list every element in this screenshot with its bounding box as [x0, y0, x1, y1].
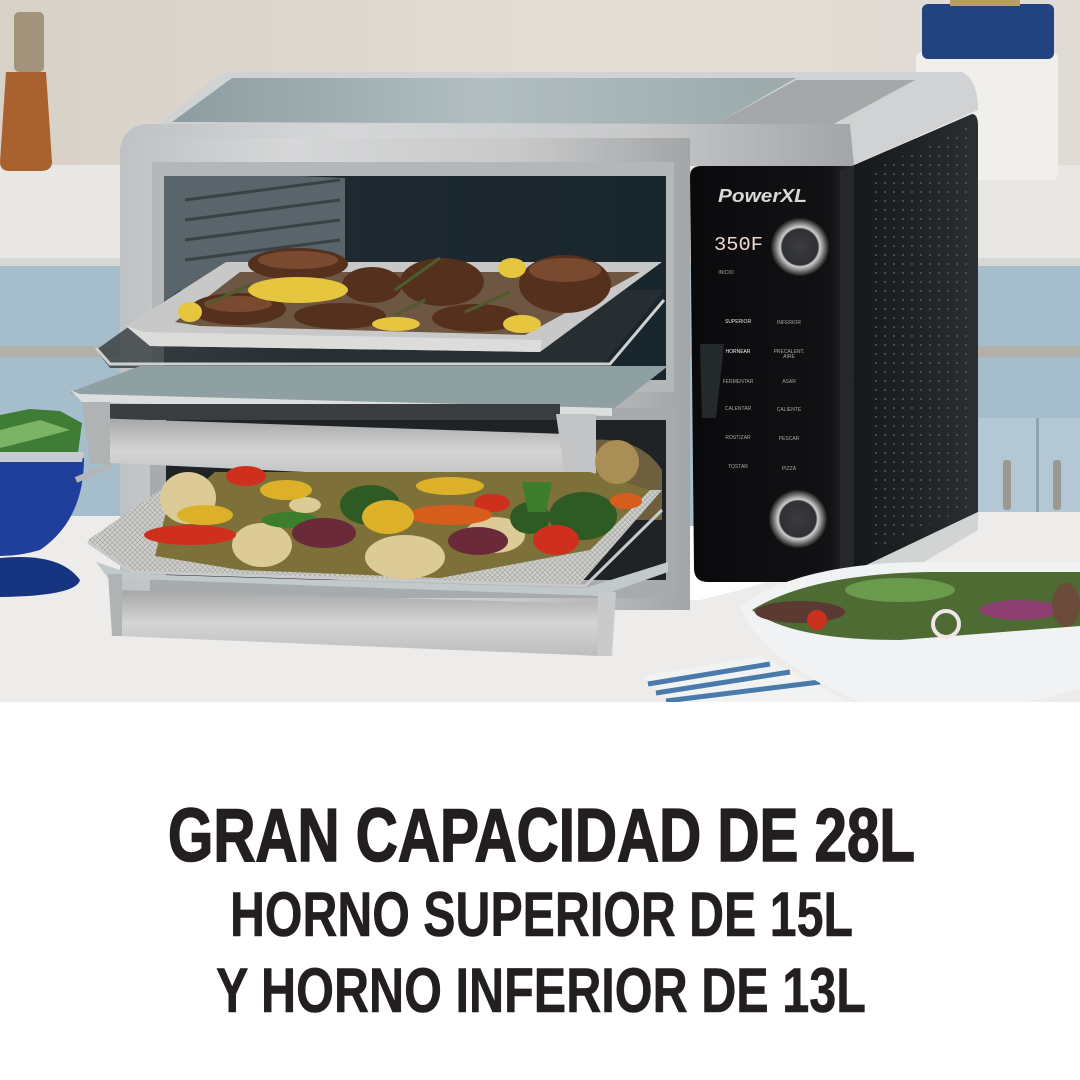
- lower knob: [769, 490, 827, 548]
- meat highlights: [204, 251, 601, 312]
- lower rack with vegetables: [88, 440, 662, 586]
- tray: [126, 262, 662, 352]
- subheading line 1: HORNO SUPERIOR DE 15L: [230, 880, 853, 950]
- labels: TOSTAR: [728, 464, 748, 470]
- labels: AIRE: [783, 354, 795, 360]
- labels: HORNEAR: [725, 349, 751, 355]
- upper door (pulled out): [70, 366, 668, 484]
- peppers: [144, 466, 579, 555]
- marble countertop: [0, 512, 1080, 702]
- bowl: [0, 458, 84, 556]
- labels: PIZZA: [782, 466, 797, 472]
- white text area: [0, 702, 1080, 1080]
- upper cavity: [152, 162, 674, 392]
- yellow peppers: [178, 258, 541, 333]
- pepper mill: [0, 12, 52, 171]
- veg mix: [155, 472, 650, 578]
- handle: [118, 590, 600, 656]
- control panel: [690, 166, 854, 582]
- labels: ROSTIZAR: [725, 435, 751, 441]
- lower door (pulled out): [96, 562, 668, 656]
- purple carrots: [292, 518, 508, 555]
- labels: ASAR: [782, 379, 796, 385]
- subheading line 2: Y HORNO INFERIOR DE 13L: [216, 956, 866, 1026]
- labels: SUPERIOR: [725, 319, 751, 325]
- handle: [90, 418, 566, 484]
- labels: CALIENTE: [777, 407, 802, 413]
- labels: CALENTAR: [725, 406, 752, 412]
- blue colander with greens: [0, 409, 112, 597]
- door handle reflection: [700, 344, 724, 418]
- kitchen counter back: [0, 165, 1080, 266]
- display: 350F: [714, 234, 763, 256]
- labels: INICIO: [718, 270, 734, 276]
- labels: PESCAR: [779, 436, 800, 442]
- salad toppings: [755, 578, 1080, 637]
- salad bowl: [740, 562, 1080, 702]
- oven top: [122, 72, 978, 166]
- brand logo: PowerXL: [718, 186, 807, 206]
- labels: PRECALENT.: [774, 349, 804, 355]
- side panel: [852, 114, 978, 590]
- meat: [190, 248, 611, 332]
- blue lower cabinets: [0, 266, 1080, 526]
- front frame: [120, 138, 690, 610]
- labels: [718, 270, 804, 472]
- greens: [0, 409, 82, 458]
- white and blue canister: [916, 0, 1058, 180]
- oven: [120, 72, 978, 610]
- striped towel: [642, 656, 850, 702]
- lower cavity: [150, 408, 674, 598]
- upper knob: [771, 218, 829, 276]
- rosemary sprigs: [205, 258, 510, 315]
- labels: FERMENTAR: [723, 379, 754, 385]
- photo: kitchen background: [0, 0, 1080, 526]
- broccoli: [262, 482, 617, 540]
- labels: INFERIOR: [777, 320, 801, 326]
- upper rack with meat tray: [96, 248, 664, 368]
- cauliflower: [160, 440, 639, 579]
